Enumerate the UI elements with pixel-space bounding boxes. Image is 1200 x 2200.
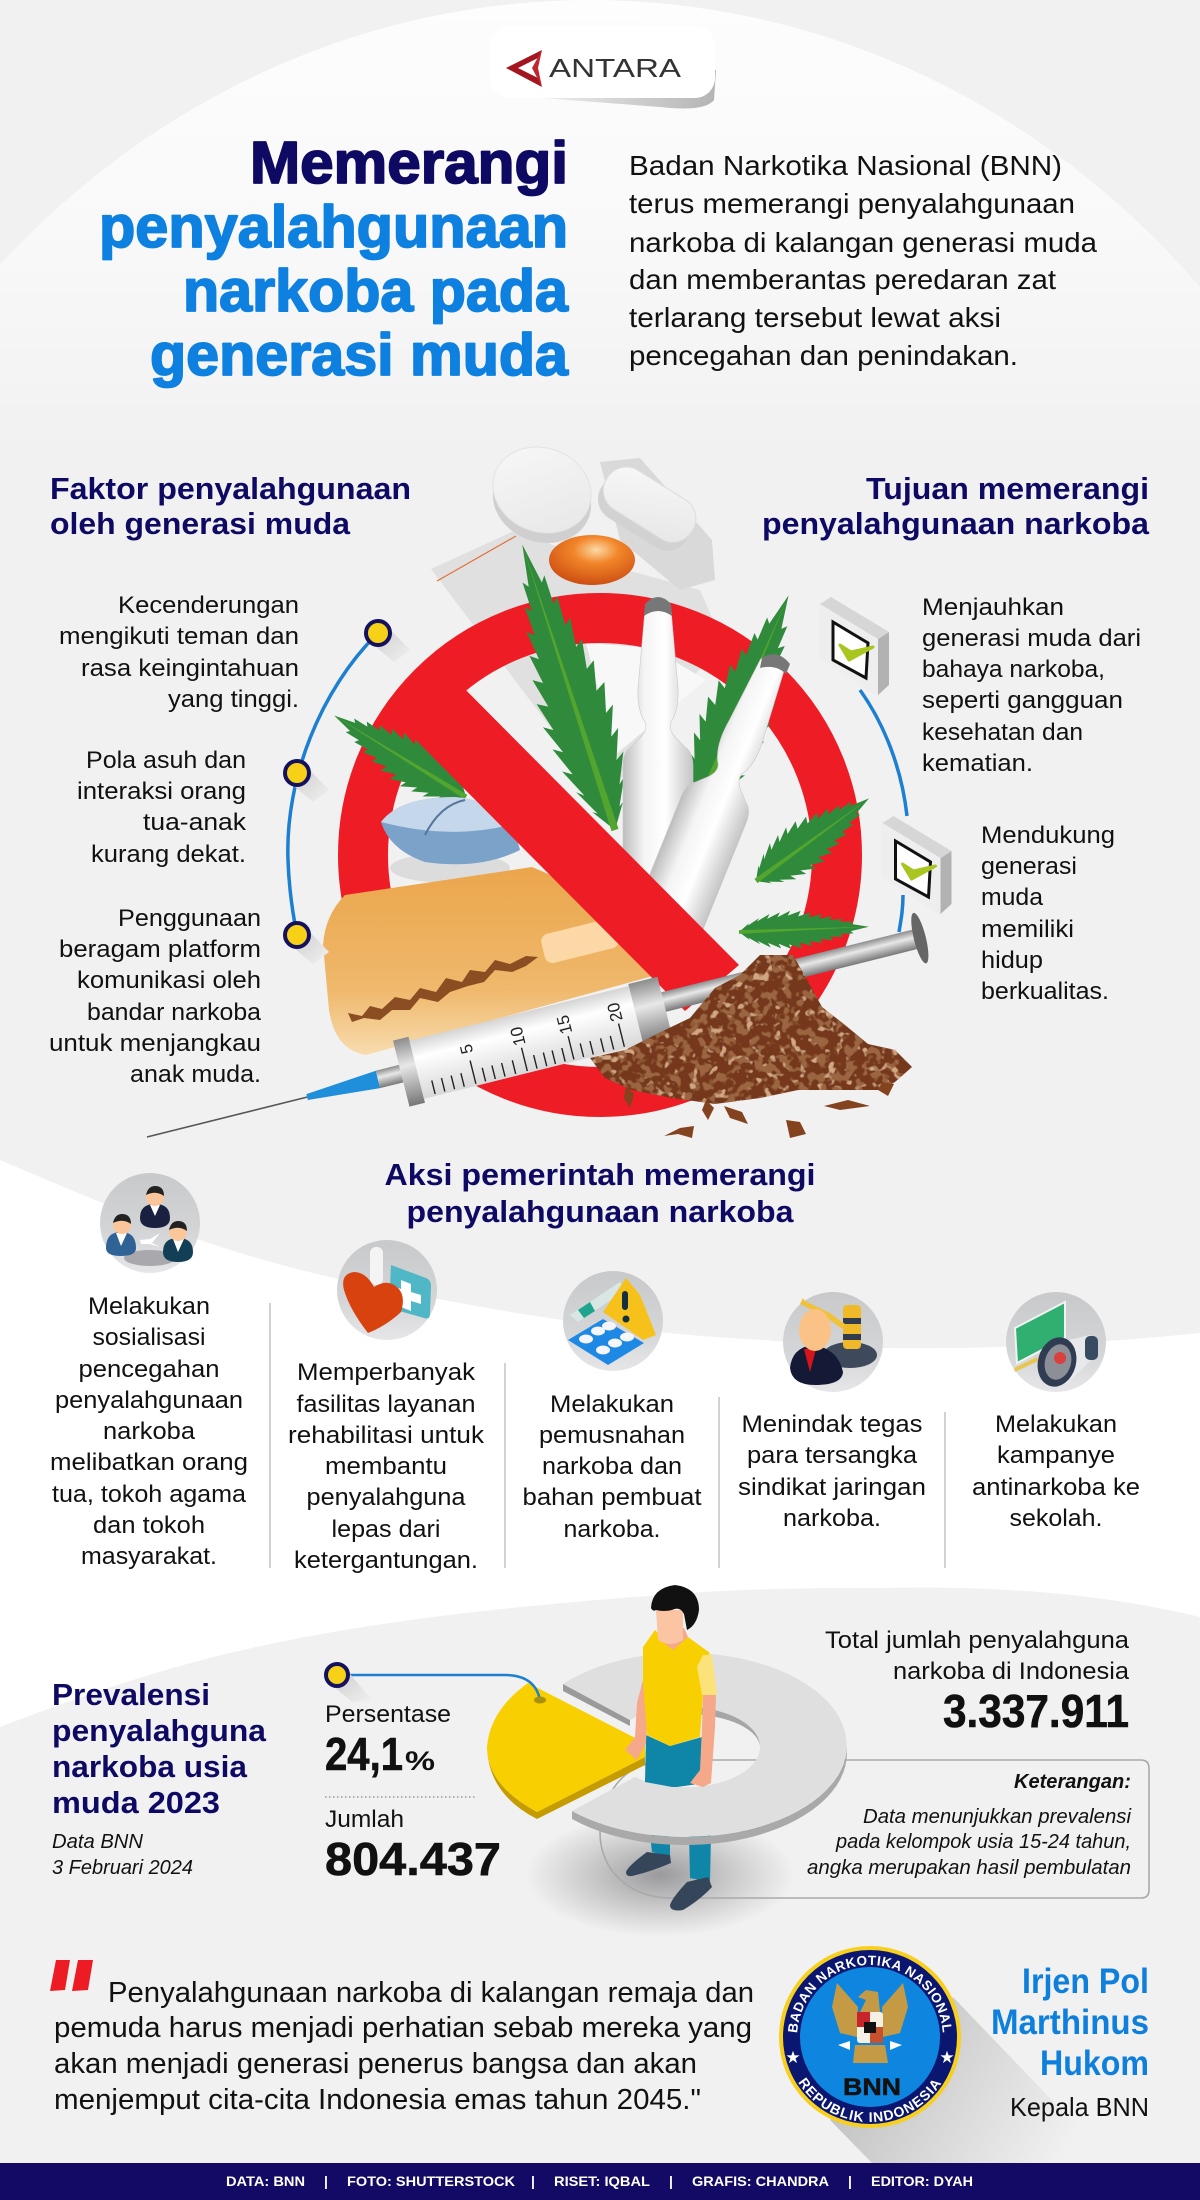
footer: | xyxy=(848,2173,852,2189)
footer: FOTO: SHUTTERSTOCK xyxy=(347,2173,515,2189)
action text 4: narkoba. xyxy=(783,1505,881,1532)
factor text 1: rasa keingintahuan xyxy=(81,655,299,682)
factor text 1: Kecenderungan xyxy=(118,592,299,619)
goal text 1: bahaya narkoba, xyxy=(922,656,1105,683)
heading: Faktor xyxy=(50,471,411,541)
syringe: 15 xyxy=(553,1013,576,1036)
speaker name: Marthinus xyxy=(991,2003,1149,2042)
action text 2: lepas dari xyxy=(332,1516,440,1543)
factor text 3 xyxy=(49,905,261,1088)
intro text: terus memerangi penyalahgunaan xyxy=(629,188,1075,219)
factor text 1: mengikuti teman dan xyxy=(59,623,299,650)
factor text 3: Penggunaan xyxy=(118,905,261,932)
goal text 1: Menjauhkan xyxy=(922,594,1064,621)
icon: checkbox 1 xyxy=(820,597,889,695)
factor text 3: anak muda. xyxy=(130,1061,261,1088)
callout line xyxy=(326,1664,546,1704)
speaker name: Kepala BNN xyxy=(1010,2092,1149,2122)
quote xyxy=(54,1977,754,2116)
factor text 1: yang tinggi. xyxy=(168,686,299,713)
factor text 3: komunikasi oleh xyxy=(77,967,261,994)
factor text 2: tua-anak xyxy=(143,809,247,836)
intro text: narkoba di kalangan generasi muda xyxy=(629,227,1097,258)
intro text: terlarang tersebut lewat aksi xyxy=(629,302,1001,333)
goal text 1 xyxy=(922,594,1141,777)
syringe xyxy=(139,910,935,1170)
logo: ANTARA xyxy=(490,26,716,108)
action text 1: masyarakat. xyxy=(81,1543,217,1570)
syringe: 10 xyxy=(507,1025,530,1048)
source note: 3 Februari 2024 xyxy=(52,1857,193,1879)
quote: pemuda harus menjadi perhatian sebab mereka yang xyxy=(54,2012,752,2044)
intro text: dan memberantas peredaran zat xyxy=(629,264,1056,295)
factor text 1 xyxy=(59,592,299,713)
heading: Prevalensi xyxy=(52,1677,267,1820)
ampoules xyxy=(621,597,808,972)
action text 1: dan tokoh xyxy=(93,1512,205,1539)
footer: | xyxy=(669,2173,673,2189)
factor text 2: Pola asuh dan xyxy=(86,747,246,774)
quote: akan menjadi generasi penerus bangsa dan akan xyxy=(54,2048,697,2080)
donut ring xyxy=(563,1653,847,1845)
icon: warning and pills xyxy=(563,1271,663,1371)
factor text 3: beragam platform xyxy=(59,936,261,963)
action text 2: fasilitas layanan xyxy=(296,1391,476,1418)
action text 3: bahan pembuat xyxy=(522,1484,702,1511)
action text 5 xyxy=(972,1411,1140,1532)
stat: total xyxy=(825,1627,1129,1737)
action text 4: Menindak tegas xyxy=(742,1411,922,1438)
footer: GRAFIS: CHANDRA xyxy=(692,2173,829,2189)
prohibition bar xyxy=(385,664,739,1011)
action text 4 xyxy=(738,1411,926,1532)
speaker name xyxy=(991,1962,1149,2122)
footer: DATA: BNN xyxy=(226,2173,305,2189)
action text 1: narkoba xyxy=(103,1418,195,1445)
factor text 2: interaksi orang xyxy=(77,778,246,805)
syringe: 20 xyxy=(604,1001,627,1024)
factor text 3: bandar narkoba xyxy=(87,999,261,1026)
stat: jumlah xyxy=(325,1806,501,1885)
footer: | xyxy=(531,2173,535,2189)
icon: judge and gavel xyxy=(783,1292,883,1392)
goal text 2: memiliki xyxy=(981,916,1074,943)
heading: Faktor: oleh generasi muda xyxy=(50,506,351,541)
goal text 2: generasi xyxy=(981,853,1077,880)
goal text 1: generasi muda dari xyxy=(922,625,1141,652)
goal text 2: muda xyxy=(981,884,1043,911)
icon: three people xyxy=(100,1173,200,1273)
action text 2: rehabilitasi untuk xyxy=(288,1422,485,1449)
tobacco pile xyxy=(590,955,912,1138)
footer: | xyxy=(324,2173,328,2189)
action text 5: sekolah. xyxy=(1010,1505,1102,1532)
note text: pada kelompok usia 15-24 tahun, xyxy=(835,1831,1131,1853)
intro text xyxy=(629,150,1097,371)
goal text 2: Mendukung xyxy=(981,822,1115,849)
goal connector with checkbox icons xyxy=(820,597,952,932)
stat: total: 3.337.911 xyxy=(943,1685,1129,1737)
action text 3: narkoba dan xyxy=(542,1453,682,1480)
action text 1: melibatkan orang xyxy=(50,1449,248,1476)
stat: persentase: Persentase xyxy=(325,1701,451,1728)
heading: Prevalensi: penyalahguna xyxy=(52,1713,267,1748)
quote: menjemput cita-cita Indonesia emas tahun 2045." xyxy=(54,2084,701,2116)
icon: heart and medical cross xyxy=(337,1240,437,1340)
action text 3: narkoba. xyxy=(564,1516,660,1543)
footer: EDITOR: DYAH xyxy=(871,2173,973,2189)
intro text: pencegahan dan penindakan. xyxy=(629,340,1018,371)
garuda xyxy=(832,1983,908,2063)
heading: Tujuan: Tujuan memerangi xyxy=(866,471,1149,506)
goal text 1: kesehatan dan xyxy=(922,719,1083,746)
BNN emblem: BADAN NARKOTIKA NASIONAL xyxy=(788,1956,952,2032)
stat: total: Total jumlah penyalahguna xyxy=(825,1627,1129,1654)
stat: persentase: % xyxy=(405,1746,435,1776)
back pills and bag xyxy=(431,433,722,780)
stat: jumlah: Jumlah xyxy=(325,1806,404,1833)
quote: Penyalahgunaan narkoba di kalangan remaja dan xyxy=(108,1977,754,2009)
stat: total: narkoba di Indonesia xyxy=(893,1658,1129,1685)
factor connector with dots xyxy=(285,621,410,964)
icon: blackboard and megaphone xyxy=(1006,1292,1106,1392)
heading: Prevalensi: muda 2023 xyxy=(52,1785,220,1820)
speaker name: Irjen Pol xyxy=(1022,1962,1149,2001)
goal text 1: kematian. xyxy=(922,750,1033,777)
title xyxy=(99,130,569,388)
note panel xyxy=(600,1760,1149,1898)
action text 3: Melakukan xyxy=(550,1391,674,1418)
action text 4: para tersangka xyxy=(747,1442,917,1469)
heading: Tujuan: penyalahgunaan narkoba xyxy=(762,506,1150,541)
BNN emblem: ★ xyxy=(785,2048,801,2067)
heading: Prevalensi: narkoba usia xyxy=(52,1749,248,1784)
icon: checkbox 2 xyxy=(882,816,952,914)
action columns xyxy=(50,1293,1140,1574)
title: penyalahgunaan xyxy=(99,194,568,260)
action text 5: Melakukan xyxy=(995,1411,1117,1438)
action text 1 xyxy=(50,1293,248,1570)
heading: Aksi pemerintah: Aksi pemerintah memerangi xyxy=(384,1157,816,1192)
icon: quotation mark xyxy=(50,1960,93,1991)
blue pill xyxy=(381,797,520,883)
title: generasi muda xyxy=(150,322,569,388)
action text 1: penyalahgunaan xyxy=(55,1387,243,1414)
BNN emblem xyxy=(779,1946,1052,2163)
chart: donut with person xyxy=(326,1585,1149,1937)
action text 2: Memperbanyak xyxy=(297,1359,476,1386)
heading: Aksi pemerintah: penyalahgunaan narkoba xyxy=(406,1194,794,1229)
prohibition ring xyxy=(363,618,837,1092)
action text 1: Melakukan xyxy=(88,1293,210,1320)
action text 3: pemusnahan xyxy=(539,1422,685,1449)
heading: Aksi pemerintah xyxy=(384,1157,816,1229)
goal text 2 xyxy=(981,822,1115,1005)
factor text 2: kurang dekat. xyxy=(91,841,246,868)
action text 1: sosialisasi xyxy=(92,1324,206,1351)
factor text 2 xyxy=(77,747,247,868)
action text 2: ketergantungan. xyxy=(294,1547,478,1574)
footer xyxy=(0,2163,1200,2200)
person xyxy=(625,1585,717,1787)
action text 4: sindikat jaringan xyxy=(738,1474,926,1501)
action text 5: kampanye xyxy=(997,1442,1115,1469)
footer: RISET: IQBAL xyxy=(554,2173,650,2189)
goal text 2: hidup xyxy=(981,947,1043,974)
note text: Keterangan: xyxy=(1014,1771,1131,1793)
BNN emblem: BNN xyxy=(843,2074,901,2101)
action text 1: pencegahan xyxy=(78,1356,220,1383)
cannabis leaves xyxy=(321,533,884,951)
lower legs and shoes xyxy=(626,1835,712,1910)
action text 3 xyxy=(522,1391,702,1543)
BNN emblem: REPUBLIK INDONESIA xyxy=(798,2077,942,2122)
note text xyxy=(807,1771,1132,1879)
note text: angka merupakan hasil pembulatan xyxy=(807,1857,1131,1879)
action text 2: penyalahguna xyxy=(306,1484,466,1511)
note text: Data menunjukkan prevalensi xyxy=(863,1806,1132,1828)
heading: Prevalensi: Prevalensi xyxy=(52,1677,210,1712)
factor text 3: untuk menjangkau xyxy=(49,1030,261,1057)
logo: ANTARA: ANTARA xyxy=(549,53,682,83)
illustration: no-drugs sign xyxy=(139,433,935,1170)
source note: Data BNN xyxy=(52,1831,144,1853)
speaker name: Hukom xyxy=(1040,2044,1149,2083)
source note xyxy=(52,1831,193,1879)
syringe: 5 xyxy=(456,1042,477,1056)
title: narkoba pada xyxy=(183,258,569,324)
stat: jumlah: 804.437 xyxy=(325,1833,501,1885)
title: Memerangi xyxy=(250,130,568,196)
action text 2: membantu xyxy=(325,1453,447,1480)
stat: persentase: 24,1 xyxy=(325,1728,403,1780)
heading: Faktor: Faktor penyalahgunaan xyxy=(50,471,411,506)
rolling paper and tobacco line xyxy=(323,867,660,1055)
heading: Tujuan xyxy=(762,471,1150,541)
intro text: Badan Narkotika Nasional (BNN) xyxy=(629,150,1062,181)
goal text 1: seperti gangguan xyxy=(922,687,1123,714)
pie slice xyxy=(487,1683,645,1819)
action text 5: antinarkoba ke xyxy=(972,1474,1140,1501)
goal text 2: berkualitas. xyxy=(981,978,1109,1005)
action text 1: tua, tokoh agama xyxy=(52,1481,246,1508)
stat: persentase xyxy=(325,1701,451,1780)
action text 2 xyxy=(288,1359,485,1574)
BNN emblem: ★ xyxy=(939,2048,955,2067)
